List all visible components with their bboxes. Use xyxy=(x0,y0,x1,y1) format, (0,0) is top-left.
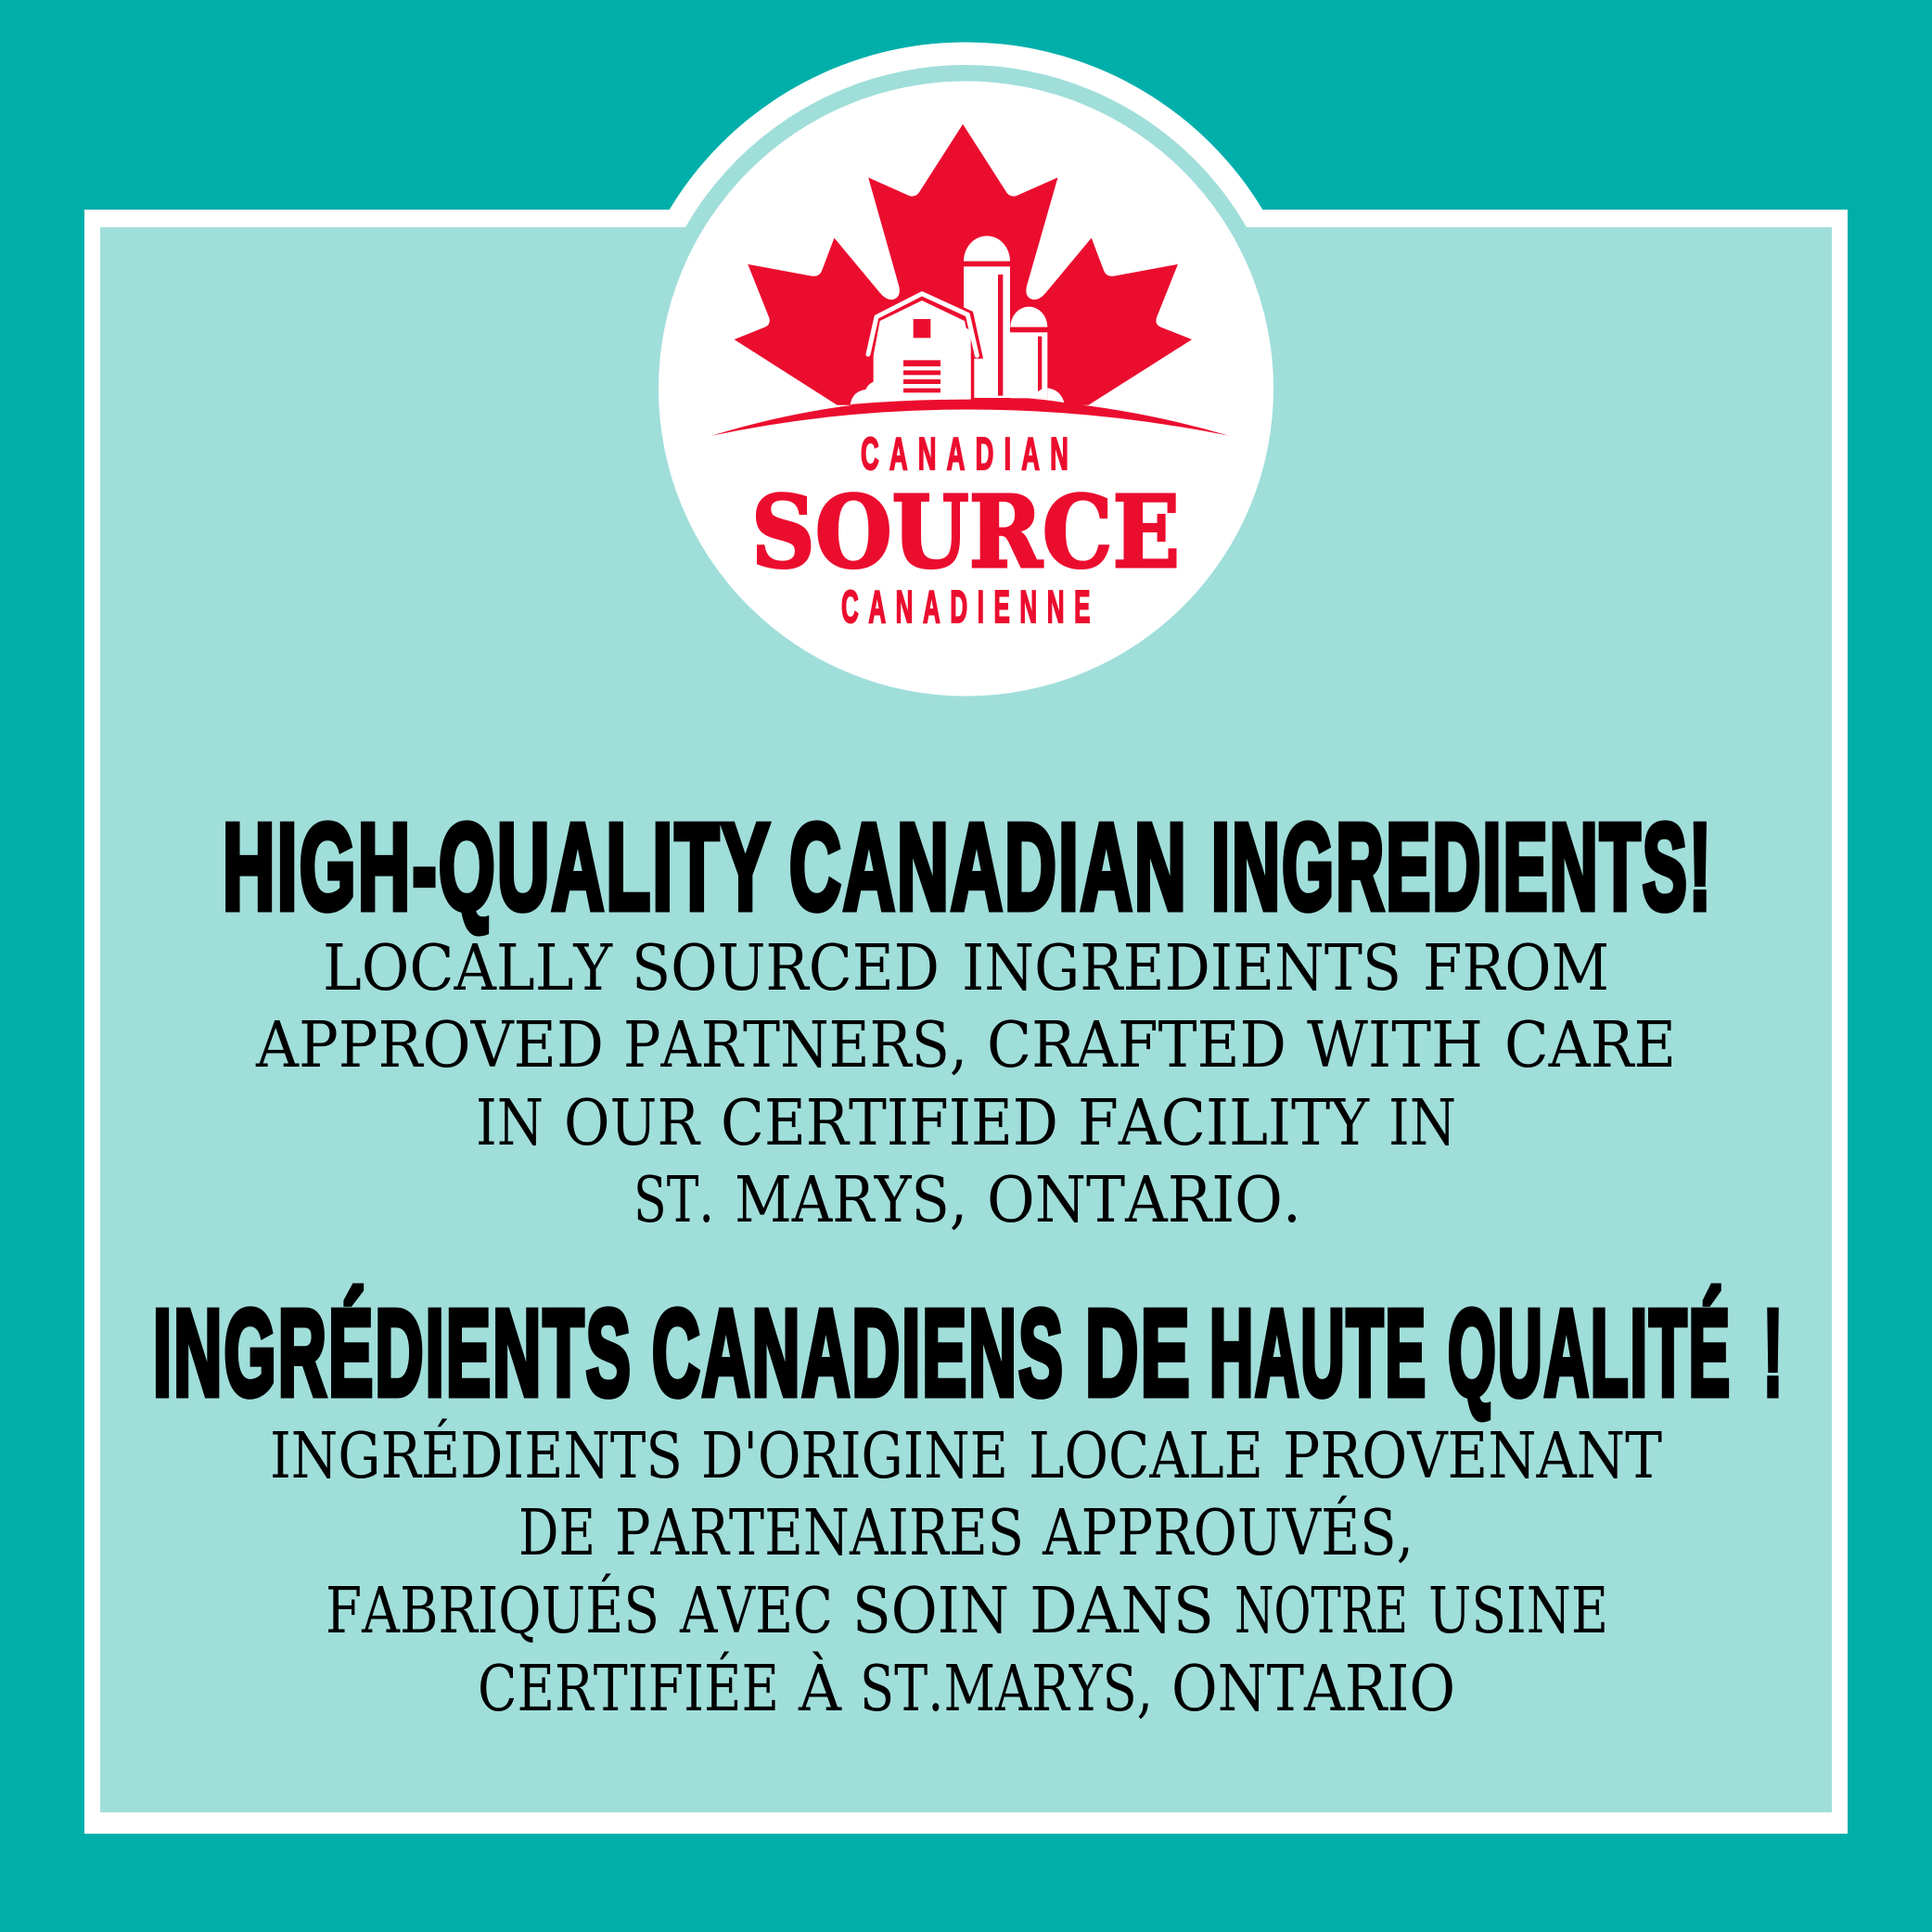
text block: English description: ONTARIO. xyxy=(987,1164,1301,1237)
text block: French description: À xyxy=(798,1652,842,1726)
heading: French: HAUTE xyxy=(1209,1285,1427,1421)
heading: French: CANADIENS xyxy=(652,1285,1065,1421)
text block: French description: NOTRE xyxy=(1235,1575,1408,1648)
text block: English description: LOCALLY xyxy=(323,932,613,1005)
text block: French description: DANS xyxy=(1030,1575,1214,1648)
text: ! xyxy=(1763,1285,1785,1421)
heading: French: DE xyxy=(1085,1285,1192,1421)
text block: English description: MARYS, xyxy=(735,1164,967,1237)
text block: French description: SOIN xyxy=(852,1575,1009,1648)
heading: English xyxy=(223,799,1713,935)
heading: English: CANADIAN xyxy=(789,799,1188,935)
barn xyxy=(851,288,1064,404)
text block: English description: PARTNERS, xyxy=(623,1009,967,1082)
text block: French description: INGRÉDIENTS xyxy=(270,1419,683,1493)
text block: English description: IN xyxy=(476,1087,544,1160)
hill curve xyxy=(711,398,1229,436)
text block: French description: FABRIQUÉS xyxy=(326,1574,659,1648)
text block: English description xyxy=(255,932,1676,1237)
text block: English description: FACILITY xyxy=(1078,1087,1370,1160)
text block: English description: SOURCED xyxy=(632,932,940,1005)
text block: English description: INGREDIENTS xyxy=(962,932,1401,1005)
logo text: SOURCE: SOURCE xyxy=(751,475,1180,591)
text block: English description: OUR xyxy=(564,1087,701,1160)
logo: Canadian Source xyxy=(711,124,1229,633)
short silo xyxy=(1010,307,1047,398)
tall silo xyxy=(964,236,1010,398)
text block: English description: ST. xyxy=(633,1164,714,1237)
text block: English description: CRAFTED xyxy=(987,1009,1286,1082)
heading: French: INGRÉDIENTS xyxy=(153,1285,633,1421)
icon: barn and silos xyxy=(851,236,1064,404)
logo text: CANADIENNE: CANADIENNE xyxy=(841,582,1100,633)
text block: French description: ONTARIO xyxy=(1171,1653,1455,1726)
text block: French description: DE xyxy=(518,1497,595,1570)
text block: French description: USINE xyxy=(1428,1575,1608,1648)
text block: French description: CERTIFIÉE xyxy=(478,1652,779,1726)
heading: English: HIGH-QUALITY xyxy=(223,799,772,935)
text block: French description: LOCALE xyxy=(1029,1420,1263,1493)
text block: English description: APPROVED xyxy=(255,1009,604,1082)
text block: French description xyxy=(270,1419,1662,1726)
text block: English description: WITH xyxy=(1307,1009,1483,1082)
text block: French description: AVEC xyxy=(679,1575,833,1648)
heading: French xyxy=(153,1285,1785,1421)
text block: English description: IN xyxy=(1388,1087,1456,1160)
text block: English description: CERTIFIED xyxy=(721,1087,1058,1160)
icon: maple leaf xyxy=(711,124,1229,436)
text block: English description: CARE xyxy=(1504,1009,1676,1082)
logo text: CANADIAN: CANADIAN xyxy=(861,429,1079,480)
text block: French description: D'ORIGINE xyxy=(701,1420,1008,1493)
text block: English description: FROM xyxy=(1423,932,1609,1005)
text block: French description: ST.MARYS, xyxy=(860,1653,1153,1726)
logo badge circle xyxy=(659,82,1273,696)
text block: French description: APPROUVÉS, xyxy=(1042,1496,1414,1570)
text block: French description: PARTENAIRES xyxy=(615,1497,1024,1570)
text block: French description: PROVENANT xyxy=(1283,1420,1662,1493)
